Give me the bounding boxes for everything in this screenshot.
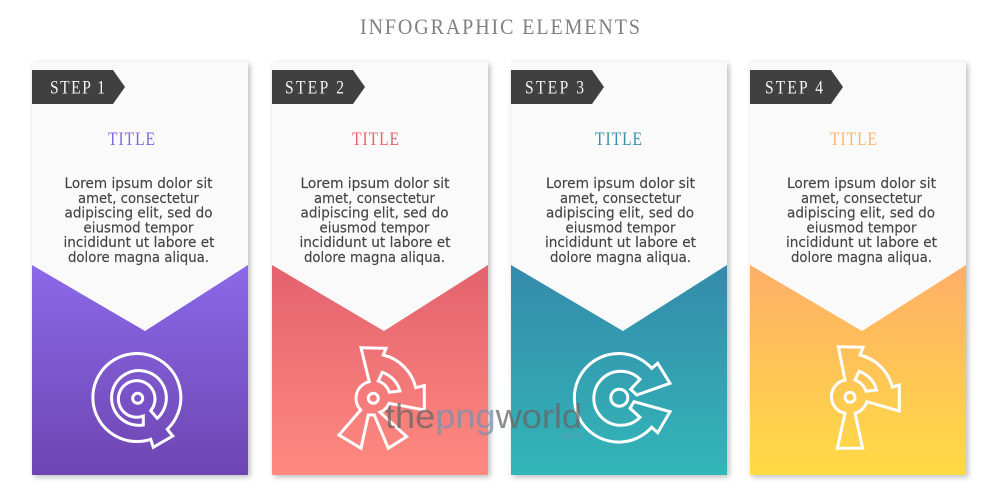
card background: [511, 62, 727, 475]
gradient chevron block: [511, 265, 727, 475]
body text: [300, 176, 451, 266]
title: INFOGRAPHIC ELEMENTS: [360, 14, 640, 39]
step ribbon: [511, 70, 604, 104]
icon: three-leg segmented wheel: [339, 348, 424, 448]
body text: amet, consectetur: [314, 191, 435, 207]
body text: amet, consectetur: [78, 191, 199, 207]
step ribbon: STEP 3: [525, 77, 584, 98]
body text: eiusmod tempor: [806, 220, 917, 236]
watermark: thepngworld: [385, 398, 582, 436]
step ribbon: [32, 70, 125, 104]
body text: adipiscing elit, sed do: [546, 206, 694, 222]
body text: dolore magna aliqua.: [68, 250, 209, 266]
body text: incididunt ut labore et: [300, 235, 451, 251]
heading: TITLE: [830, 129, 877, 149]
card background: [32, 62, 248, 475]
body text: amet, consectetur: [801, 191, 922, 207]
body text: adipiscing elit, sed do: [64, 206, 212, 222]
body text: [545, 176, 696, 266]
body text: dolore magna aliqua.: [791, 250, 932, 266]
heading: TITLE: [108, 129, 155, 149]
body text: incididunt ut labore et: [545, 235, 696, 251]
body text: incididunt ut labore et: [64, 235, 215, 251]
card background: [750, 62, 966, 475]
panel: step 1: [32, 62, 248, 475]
body text: amet, consectetur: [560, 191, 681, 207]
body text: Lorem ipsum dolor sit: [300, 176, 450, 192]
panel: step 4: [750, 62, 966, 475]
body text: Lorem ipsum dolor sit: [787, 176, 936, 192]
body text: adipiscing elit, sed do: [300, 206, 448, 222]
step ribbon: [750, 70, 843, 104]
step ribbon: STEP 2: [285, 77, 344, 98]
body text: incididunt ut labore et: [786, 235, 937, 251]
gradient chevron block: [750, 265, 966, 475]
card background: [272, 62, 488, 475]
body text: Lorem ipsum dolor sit: [546, 176, 695, 192]
body text: [64, 176, 215, 266]
step ribbon: [272, 70, 365, 104]
panel: step 3: [511, 62, 727, 475]
icon: spiral Q: [93, 354, 181, 447]
body text: eiusmod tempor: [320, 220, 430, 236]
watermark: .com: [558, 431, 583, 442]
icon: two-lobe segmented wheel: [831, 347, 899, 448]
heading: TITLE: [352, 129, 399, 149]
step ribbon: STEP 4: [765, 77, 823, 98]
gradient chevron block: [32, 265, 248, 475]
step ribbon: STEP 1: [50, 77, 105, 98]
body text: adipiscing elit, sed do: [787, 206, 935, 222]
body text: eiusmod tempor: [566, 220, 676, 236]
panel: step 2: [272, 62, 488, 475]
gradient chevron block: [272, 265, 488, 475]
body text: dolore magna aliqua.: [304, 250, 445, 266]
body text: eiusmod tempor: [84, 220, 194, 236]
body text: dolore magna aliqua.: [550, 250, 691, 266]
body text: Lorem ipsum dolor sit: [64, 176, 213, 192]
heading: TITLE: [595, 129, 642, 149]
icon: circular double arrow: [574, 353, 670, 442]
body text: [786, 176, 937, 266]
